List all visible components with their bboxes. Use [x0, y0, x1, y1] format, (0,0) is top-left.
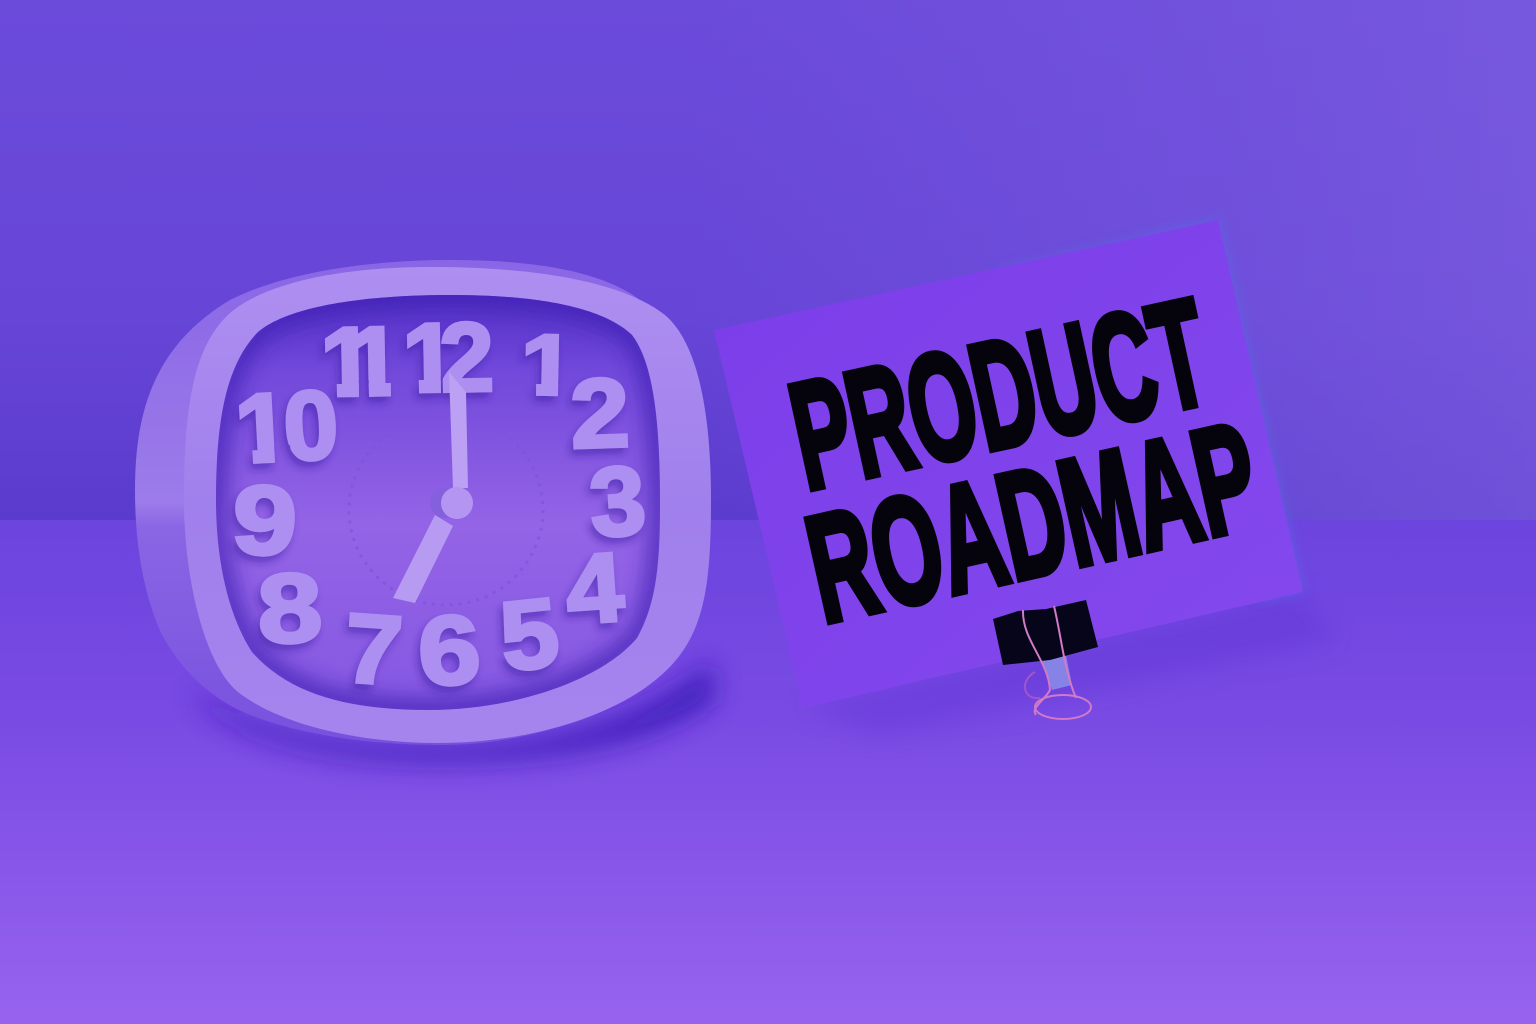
clip arm plate	[1040, 650, 1072, 690]
background wall	[0, 0, 1536, 521]
card glow	[1000, 220, 1303, 600]
clock numerals	[230, 301, 649, 707]
clock body side	[135, 260, 670, 745]
binder clip	[993, 600, 1098, 719]
card sheet	[714, 220, 1303, 708]
alarm clock	[135, 260, 711, 745]
face inner shadow	[216, 295, 660, 710]
numeral 2: 2	[568, 358, 631, 469]
background floor	[0, 520, 1536, 1024]
numeral 6: 6	[415, 595, 483, 707]
numeral 3: 3	[586, 444, 649, 558]
numeral 1: 1	[520, 316, 576, 414]
numeral 5: 5	[495, 578, 564, 692]
hand hub	[430, 487, 473, 519]
clock shadow on floor	[190, 660, 716, 763]
numeral 10: 10	[232, 369, 337, 484]
clip wire loops	[1023, 606, 1091, 719]
product roadmap card	[714, 220, 1303, 708]
numeral 9: 9	[230, 464, 300, 577]
numeral 7: 7	[341, 593, 406, 706]
clock face	[216, 295, 660, 710]
numeral 4: 4	[562, 532, 627, 645]
clip black body	[993, 600, 1098, 665]
clock bezel	[184, 267, 711, 743]
face texture ring	[349, 415, 543, 605]
hour hand	[393, 515, 453, 603]
card title line one: PRODUCT	[777, 267, 1222, 522]
card shadow on floor	[800, 592, 1340, 735]
numeral 12: 12	[401, 301, 491, 413]
minute hand	[449, 372, 468, 488]
numeral 11: 11	[319, 306, 400, 417]
numeral 8: 8	[256, 552, 324, 664]
